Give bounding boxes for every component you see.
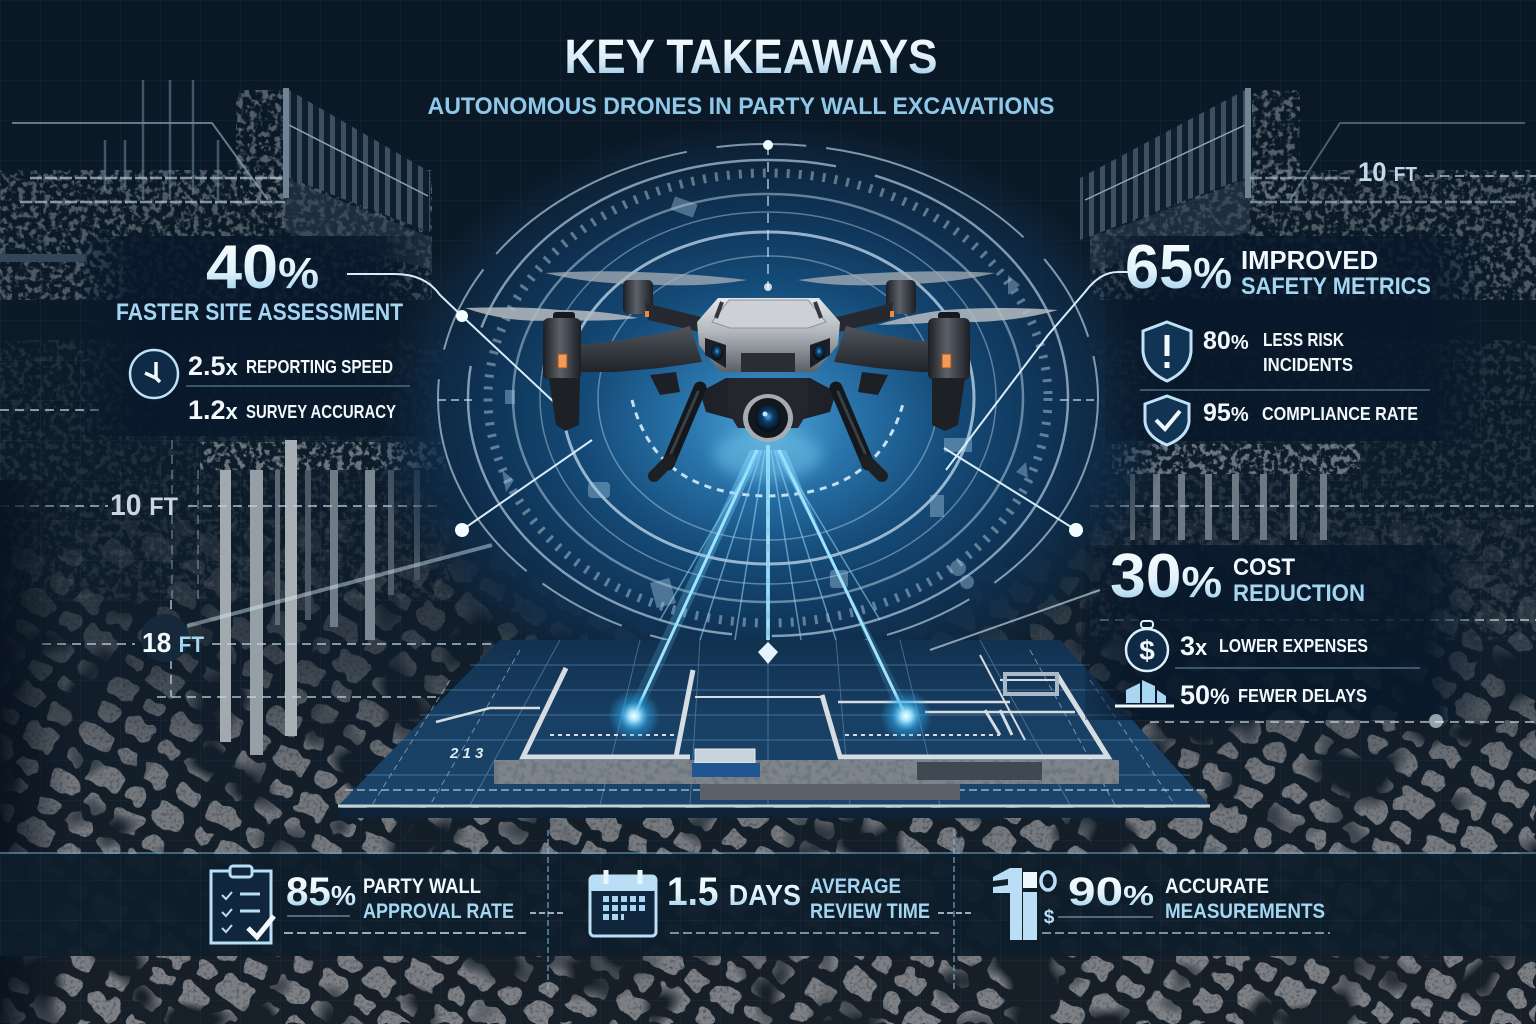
bottom stat: accurate measurements: 90 % [1068,870,1154,914]
bottom stat: accurate measurements [993,868,1330,940]
callout lines [187,272,1132,650]
bottom stat: accurate measurements: MEASUREMENTS [1165,900,1325,923]
right text panel [1105,236,1490,441]
bottom stat: approval rate: PARTY WALL [363,875,481,898]
right motor pod [928,312,970,431]
stat: 30 percent cost reduction: FEWER DELAYS [1238,686,1367,706]
side soil texture [0,340,1536,640]
left motor pod [543,312,581,431]
floor plan walls [436,655,1108,757]
bottom stat: approval rate [211,866,526,943]
stat: 40 percent faster site assessment: REPORTING SPEED [246,357,393,377]
yoke [700,378,836,420]
icon: clock [130,350,178,398]
icon: calendar [590,870,656,936]
stat: 40 percent faster site assessment: FASTER SITE ASSESSMENT [116,299,403,326]
dimension label: 18 ft: 18 FT [142,627,205,658]
rubble ground texture [0,520,1536,1024]
stat: 30 percent cost reduction: LOWER EXPENSES [1219,636,1368,656]
dimension label: 18 ft [141,614,205,662]
right excavation supports [1112,444,1360,540]
right perspective wall [1080,88,1525,240]
icon: dollar coin: $ [1139,635,1155,666]
stat: 65 percent improved safety metrics: 80% [1203,327,1249,355]
callout nodes [455,140,1443,728]
title: KEY TAKEAWAYS [564,31,938,84]
floor plan access hatch [692,749,760,777]
stat: 40 percent faster site assessment: 2.5x [188,351,239,381]
drone body shell [697,298,840,372]
stat: 30 percent cost reduction [1095,542,1470,710]
stat: 30 percent cost reduction: 50% [1180,680,1230,710]
blueprint measurement lines [0,176,1536,722]
stat: 30 percent cost reduction: 30% [1110,542,1222,611]
rear motors and arms [623,280,916,395]
floor plan room marker [1005,674,1057,694]
front propellers [465,307,1058,325]
left soil bank [0,170,432,300]
bottom stat: review time: REVIEW TIME [810,900,930,923]
stat: 65 percent improved safety metrics: 95% [1203,399,1249,427]
stat: 65 percent improved safety metrics: INCIDENTS [1263,355,1353,375]
icon: clipboard [211,866,274,943]
icon: caliper [993,868,1055,940]
radar glow [368,110,1168,710]
icon: building [1115,680,1174,706]
stat: 65 percent improved safety metrics: 65% [1125,233,1232,302]
radar rings [438,144,1098,652]
stat: 40 percent faster site assessment: 40% [206,233,319,302]
plan dimension note: 2 1 3 [449,745,484,762]
subtitle: AUTONOMOUS DRONES IN PARTY WALL EXCAVATIONS [428,93,1054,120]
bottom stats band [0,830,1536,990]
bottom stat: accurate measurements: ACCURATE [1165,875,1269,898]
landing legs [654,388,882,476]
blueprint floor plan [338,640,1210,818]
stat: 65 percent improved safety metrics: IMPROVED [1241,245,1378,275]
bottom stat: review time: 1.5 DAYS [667,870,801,914]
icon: check shield [1145,396,1189,445]
drone [465,271,1058,476]
icon: warning shield [1143,322,1191,381]
bottom stat: review time [590,870,940,936]
stat: 30 percent cost reduction: REDUCTION [1233,580,1365,607]
icon: dollar coin [1126,621,1168,671]
stat: 40 percent faster site assessment: SURVEY ACCURACY [246,402,396,422]
left edge vignette [0,480,70,1024]
bottom stat: approval rate: 85% [286,870,356,914]
bottom stat: approval rate: APPROVAL RATE [363,900,514,923]
radar data tiles [502,196,1028,608]
floor plan foundation rubble strip [494,760,1119,800]
stat: 65 percent improved safety metrics [1125,233,1470,445]
left text panel [85,236,430,436]
icon: caliper: $ [1044,907,1055,928]
front arms [579,326,957,372]
stat: 30 percent cost reduction: COST [1233,554,1295,581]
stat: 65 percent improved safety metrics: LESS RISK [1263,330,1344,350]
rear propellers [545,271,995,285]
dimension label: 10 ft right: 10 FT [1358,157,1417,187]
stat: 65 percent improved safety metrics: COMPLIANCE RATE [1262,404,1418,424]
right soil bank [1090,170,1536,300]
stat: 30 percent cost reduction: 3x [1180,631,1208,661]
camera gimbal [728,378,808,442]
upper left grey band [0,254,87,262]
left perspective wall [12,80,430,232]
stat: 40 percent faster site assessment [100,233,416,425]
scan beams [608,430,932,742]
stat: 65 percent improved safety metrics: SAFETY METRICS [1241,273,1431,300]
dimension label: 10 ft left: 10 FT [110,489,178,522]
stat: 40 percent faster site assessment: 1.2x [188,395,239,425]
cost text panel [1085,545,1485,720]
left excavation supports [200,440,446,755]
bottom stat: review time: AVERAGE [810,875,901,898]
